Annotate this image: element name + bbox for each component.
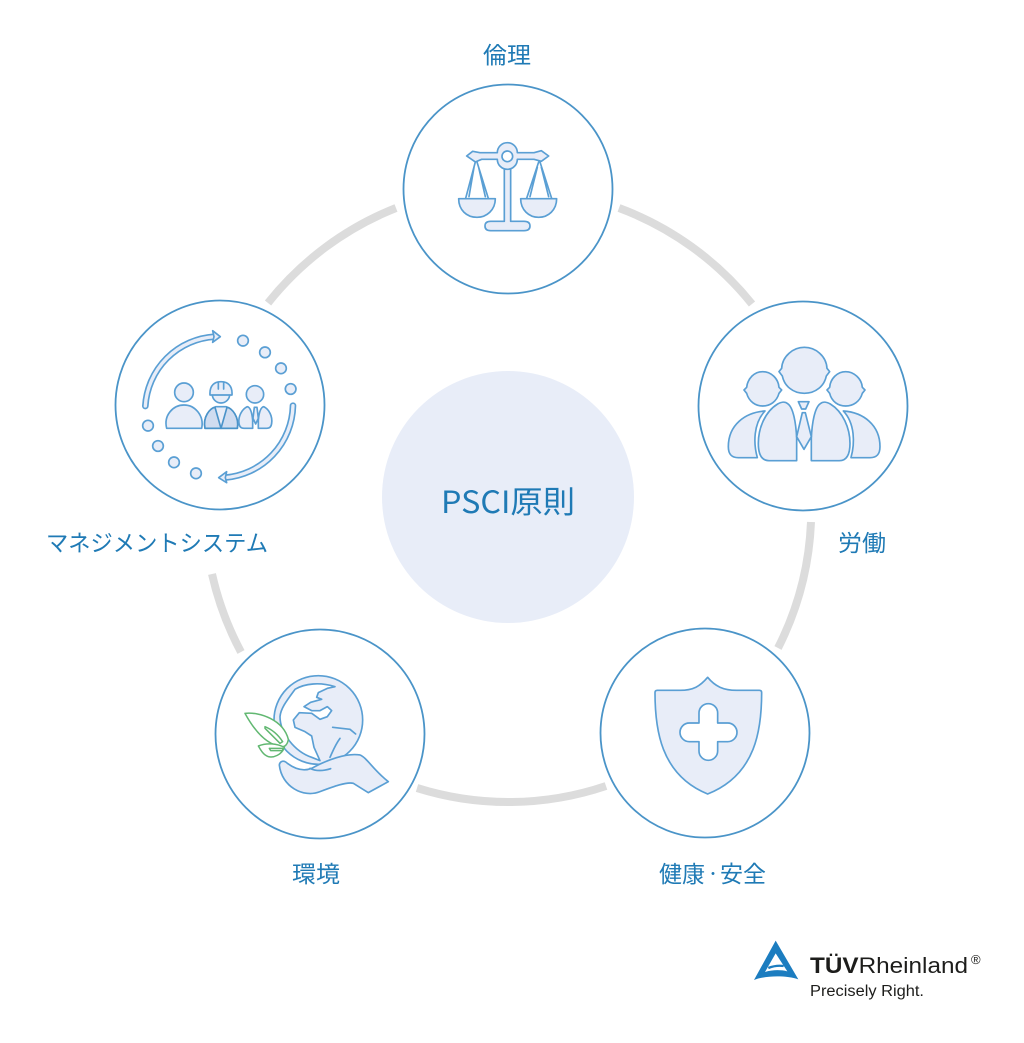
center circle: PSCI principles: PSCI原則 (441, 477, 575, 522)
label: health and safety: ・ (706, 866, 720, 882)
panel: management systems (46, 300, 324, 556)
icon: balance scale (459, 143, 557, 231)
panel: health and safety (600, 628, 810, 887)
logo: TÜV Rheinland (754, 941, 981, 1000)
icon: shield with cross (655, 677, 762, 794)
label: labor: 労働 (838, 530, 886, 556)
label: environment: 環境 (292, 861, 340, 887)
logo wordmark: TÜVRheinland (810, 953, 968, 978)
center circle: PSCI principles (382, 371, 634, 623)
label: health and safety: 健康 (659, 861, 705, 887)
icon: cycle arrows and dots (143, 331, 296, 483)
logo tagline: Precisely Right. (810, 983, 924, 1000)
panel: environment (216, 630, 424, 887)
icon: logo triangle (754, 941, 798, 980)
panel: ethics (404, 42, 612, 294)
icon: three people (728, 347, 880, 461)
panel: labor (698, 302, 908, 556)
icon: globe in hand with leaves (245, 676, 388, 794)
registered mark: ® (971, 952, 981, 967)
label: management systems: マネジメントシステム (46, 530, 268, 556)
label: health and safety: 安全 (720, 861, 766, 887)
label: ethics: 倫理 (483, 42, 531, 68)
ring connecting the five principles (212, 208, 811, 802)
icon: three workers (166, 382, 272, 428)
